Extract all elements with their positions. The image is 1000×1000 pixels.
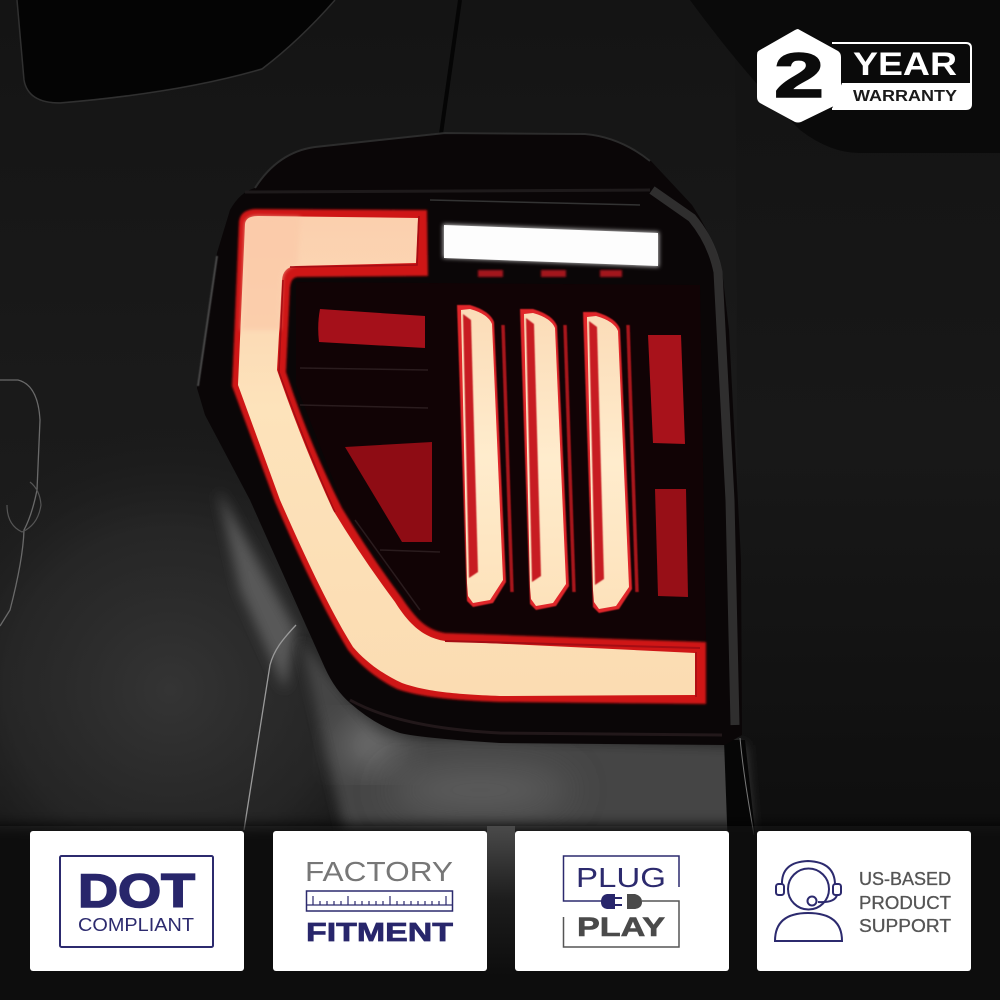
support text bbox=[859, 869, 951, 936]
bottom dark band bbox=[0, 826, 1000, 1000]
lamp housing bbox=[197, 132, 742, 745]
COMPLIANT: COMPLIANT bbox=[78, 915, 194, 935]
ruler icon bbox=[306, 891, 453, 911]
PLAY: PLAY bbox=[577, 912, 665, 942]
housing edge highlights bbox=[198, 133, 735, 735]
support text: SUPPORT bbox=[859, 916, 951, 936]
lower red reflector bbox=[345, 442, 432, 542]
door seam bbox=[441, 0, 460, 134]
FITMENT: FITMENT bbox=[306, 917, 453, 947]
card: factory fitment bbox=[273, 831, 487, 971]
plug outline top bbox=[564, 856, 679, 901]
PLUG: PLUG bbox=[576, 862, 666, 893]
card: DOT compliant bbox=[30, 831, 244, 971]
support text: US-BASED bbox=[859, 869, 951, 889]
upper right dark window bbox=[690, 0, 1000, 153]
small glints bbox=[300, 368, 440, 610]
upper red reflector bbox=[318, 309, 425, 348]
vertical bar 2 bbox=[520, 309, 569, 610]
fuel door bbox=[0, 380, 41, 626]
right side lower reflector bbox=[655, 489, 688, 597]
WARRANTY: WARRANTY bbox=[853, 88, 957, 105]
vertical bar 3 bbox=[583, 312, 632, 613]
support text: PRODUCT bbox=[859, 893, 951, 913]
play outline bottom bbox=[564, 901, 679, 947]
headset agent icon bbox=[775, 861, 842, 941]
card: US-based support bbox=[757, 831, 971, 971]
rear side window bbox=[17, 0, 335, 103]
right side upper reflector bbox=[648, 335, 685, 444]
red reflections under reverse light bbox=[478, 270, 622, 277]
red side strips bbox=[503, 325, 637, 592]
lower body light sheen bbox=[218, 490, 752, 835]
DOT: DOT bbox=[78, 864, 195, 917]
right lower edge bbox=[724, 740, 757, 850]
FACTORY: FACTORY bbox=[305, 856, 453, 887]
hexagon bbox=[757, 29, 841, 122]
C-shaped light tube bbox=[232, 209, 706, 704]
plug icon bbox=[601, 894, 642, 909]
vertical bar 1 bbox=[457, 305, 506, 607]
tail light bbox=[197, 132, 742, 745]
numeral 2: 2 bbox=[774, 41, 824, 111]
warranty label frame bbox=[832, 43, 971, 109]
inner lens dark red bbox=[296, 282, 706, 640]
white reverse light bbox=[443, 224, 659, 267]
card: plug and play bbox=[515, 831, 729, 971]
warranty badge bbox=[757, 29, 971, 122]
YEAR: YEAR bbox=[853, 46, 957, 82]
